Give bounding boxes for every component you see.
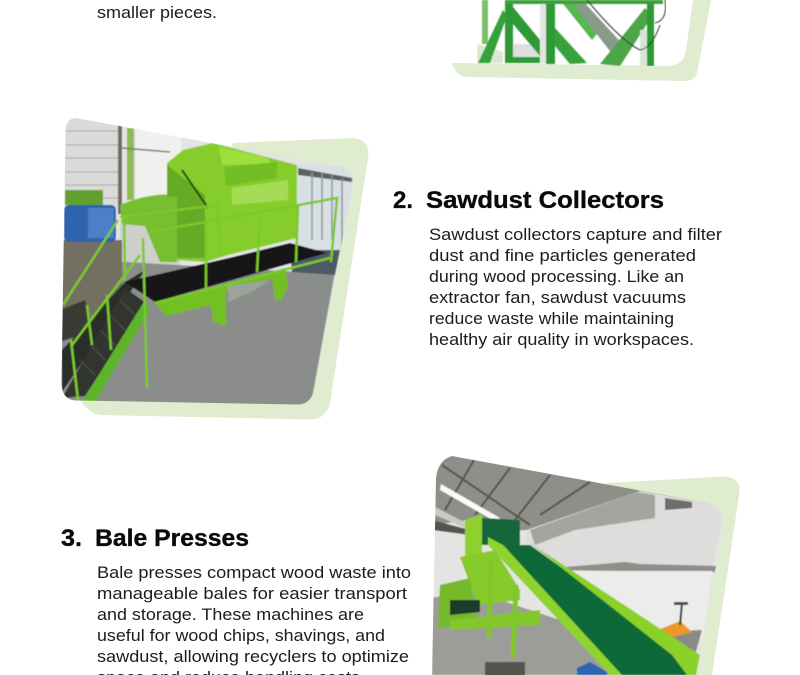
text: sawdust collectors description: reduce waste while maintaining [429, 310, 674, 328]
photo: sawdust collector machine [62, 118, 354, 404]
heading: sawdust collectors: Sawdust Collectors [426, 187, 664, 214]
text: sawdust collectors description: extractor fan, sawdust vacuums [429, 289, 686, 307]
section 2 text [393, 187, 723, 349]
backdrop: pale green frame [80, 138, 369, 420]
text: bale presses description: and storage. These machines are [97, 606, 364, 624]
text: sawdust collectors description: Sawdust collectors capture and filter [429, 226, 723, 244]
section 3 text [61, 525, 411, 675]
top section: shredder continuation [97, 0, 711, 81]
text: sawdust collectors description [429, 226, 723, 349]
heading: sawdust collectors: 2. [393, 187, 413, 214]
text: sawdust collectors description: healthy air quality in workspaces. [429, 331, 694, 349]
panel: sawdust collector photo [55, 110, 369, 420]
text: sawdust collectors description: during wood processing. Like an [429, 268, 684, 286]
text: bale presses description: sawdust, allowing recyclers to optimize [97, 648, 409, 666]
text: end of section 1 description: smaller pieces. [97, 4, 217, 22]
heading: bale presses: Bale Presses [95, 525, 249, 552]
text: sawdust collectors description: dust and fine particles generated [429, 247, 696, 265]
panel: bale press photo [430, 450, 740, 675]
text: bale presses description: manageable bales for easier transport [97, 585, 407, 603]
text: bale presses description [97, 564, 411, 675]
photo: green machine frame [477, 0, 666, 66]
text: bale presses description: useful for wood chips, shavings, and [97, 627, 385, 645]
backdrop: pale green frame [600, 476, 740, 675]
photo: bale press and conveyor [430, 450, 730, 675]
heading: bale presses: 3. [61, 525, 82, 552]
text: bale presses description: Bale presses compact wood waste into [97, 564, 411, 582]
backdrop: pale green frame top [452, 0, 711, 81]
